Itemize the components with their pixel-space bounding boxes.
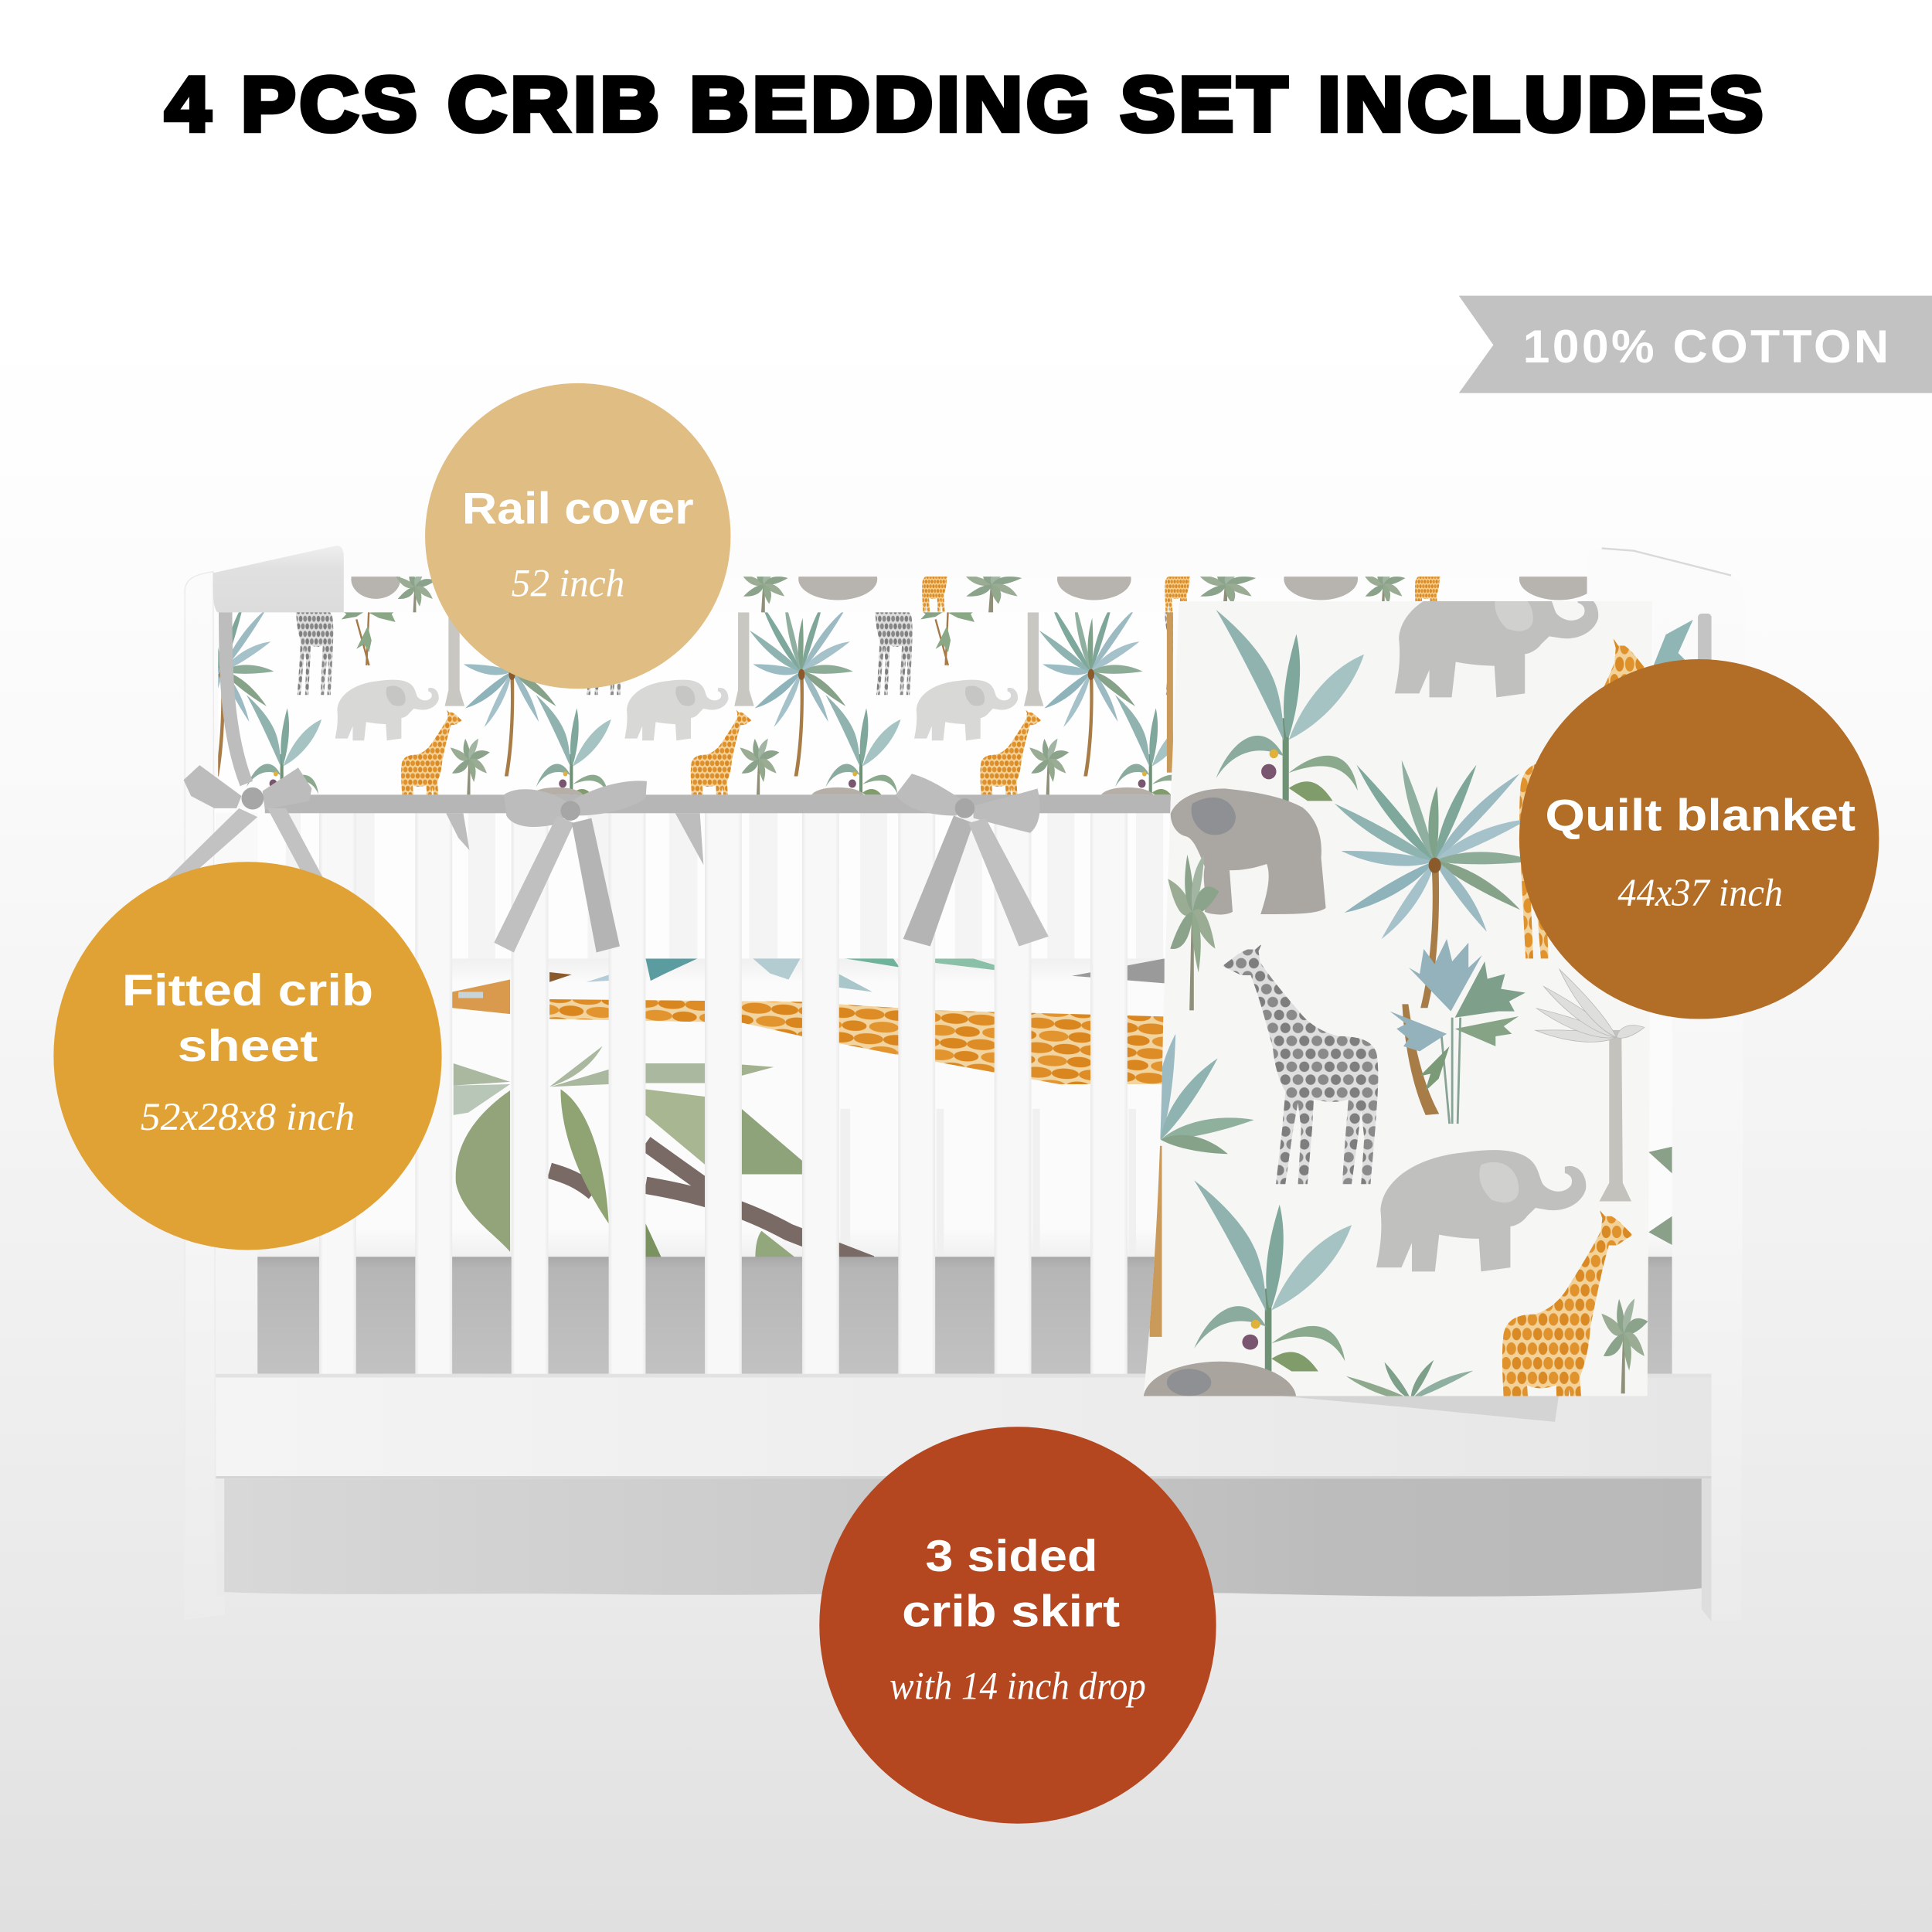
left post — [185, 572, 224, 1619]
right post — [1587, 549, 1745, 1621]
inner left post — [216, 813, 257, 1375]
quilt orange giraffe — [1502, 1210, 1633, 1481]
bow left — [166, 765, 323, 879]
quilt top elephant — [1394, 601, 1598, 697]
lower front rail — [216, 1374, 1712, 1478]
quilt grey giraffe — [1223, 944, 1378, 1184]
edge trunk strip — [1167, 612, 1173, 773]
panel: rail cover front pattern — [218, 612, 1173, 794]
sheet giraffe head — [452, 972, 572, 1014]
quilt left small palm — [1165, 847, 1219, 1010]
grey mattress base — [257, 1257, 1673, 1375]
ribbon: 100% cotton — [1459, 296, 1932, 393]
crib back panel — [213, 807, 1710, 968]
callout: quilt blanket: 44x37 inch — [1617, 872, 1783, 915]
quilt lower banana — [1194, 1180, 1352, 1372]
ribbon: 100% cotton: 100% COTTON — [1523, 320, 1891, 372]
callout: fitted crib sheet: Fitted crib — [122, 966, 373, 1015]
callout: fitted crib sheet: 52x28x8 inch — [141, 1096, 355, 1139]
quilt top banana — [1216, 610, 1364, 801]
right sheet leaves — [1648, 1147, 1672, 1245]
sheet branches — [549, 1144, 871, 1264]
callout: fitted crib sheet: sheet — [178, 1022, 318, 1071]
sheet green leaves — [454, 1046, 802, 1258]
bow right — [896, 774, 1049, 946]
right back fabric with palm and strap — [1654, 614, 1712, 665]
pattern repeat — [278, 554, 611, 827]
crib slats — [319, 813, 1128, 1378]
quilt sketched tree — [1534, 968, 1645, 1202]
quilt lower rock elephant — [1144, 1362, 1296, 1435]
callout: quilt blanket: Quilt blanket — [1545, 791, 1855, 841]
quilt left palm — [1150, 1032, 1255, 1337]
quilt lower fronds — [1345, 1358, 1474, 1404]
title: 4 PCS CRIB BEDDING SET INCLUDES — [165, 62, 1767, 147]
quilt top giraffe — [1519, 638, 1645, 958]
callout: crib skirt — [819, 1427, 1216, 1824]
rock elephants at hem — [537, 787, 1154, 794]
crib skirt — [224, 1476, 1702, 1597]
mattress folds — [841, 1109, 1136, 1236]
back slats — [286, 813, 1163, 961]
rail cover left strap — [226, 612, 247, 784]
callout: crib skirt: with 14 inch drop — [889, 1665, 1146, 1709]
fitted crib sheet mattress — [257, 957, 1675, 1264]
bow middle — [494, 781, 647, 952]
sheet giraffe neck — [549, 999, 1165, 1084]
callout: quilt blanket — [1519, 659, 1879, 1019]
callout: rail cover: Rail cover — [462, 485, 694, 534]
callout: rail cover: 52 inch — [512, 563, 624, 606]
callout: rail cover — [425, 383, 730, 689]
quilt corner flap — [1281, 1396, 1559, 1422]
sheet teal leaves — [587, 957, 1165, 992]
rail cover bottom piping — [265, 794, 1173, 813]
panel: rail cover fold over — [351, 577, 1587, 612]
quilt dark elephant — [1171, 788, 1326, 915]
crib illustration — [167, 546, 1731, 1621]
callout: crib skirt: crib skirt — [902, 1587, 1120, 1637]
quilt small palm — [1600, 1294, 1648, 1393]
callout: fitted crib sheet — [53, 862, 442, 1250]
quilt fan palm — [1389, 939, 1526, 1124]
quilt grey elephant — [1376, 1150, 1586, 1271]
quilt palm — [1332, 759, 1535, 1008]
hanging ties — [446, 813, 703, 865]
panel: quilt blanket — [1144, 580, 1652, 1481]
right inner post — [1672, 665, 1713, 1375]
left headboard corner — [213, 546, 344, 612]
callout: crib skirt: 3 sided — [925, 1532, 1098, 1581]
